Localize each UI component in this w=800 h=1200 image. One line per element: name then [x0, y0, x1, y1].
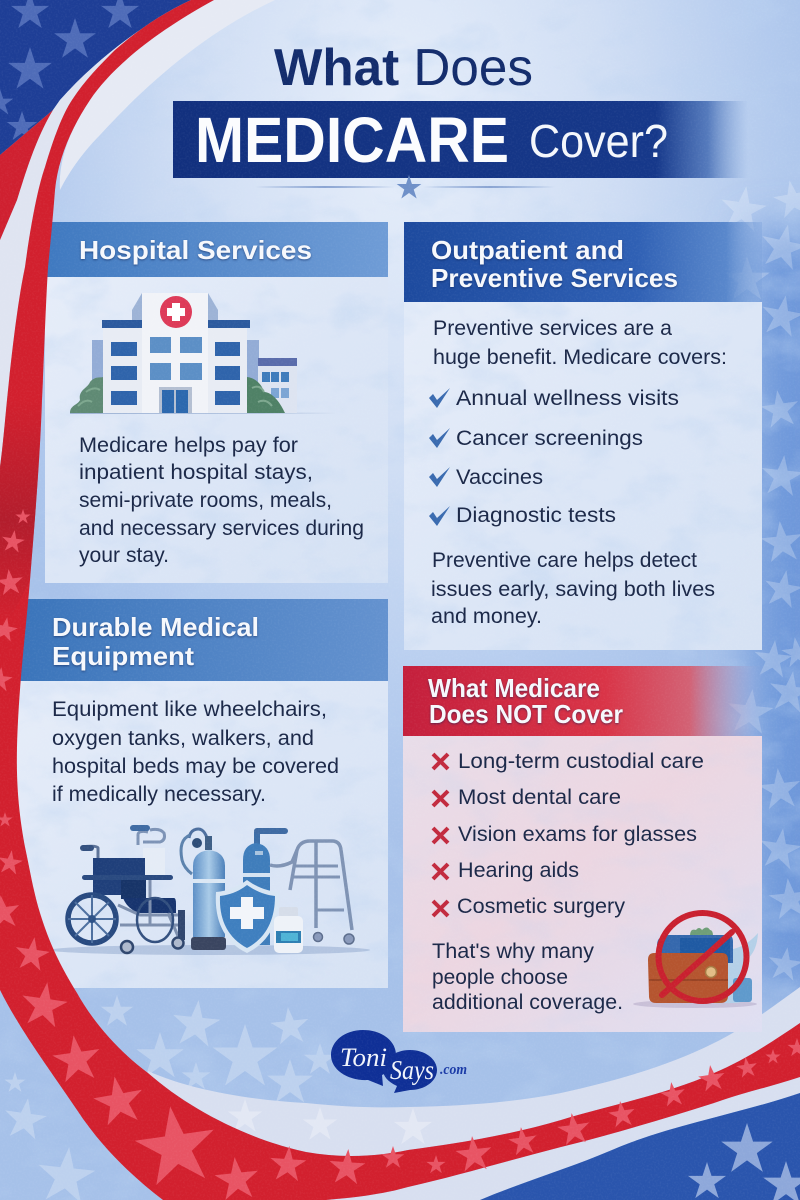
icon: medical equipment group [50, 825, 370, 955]
outpatient intro text: huge benefit. Medicare covers: [433, 346, 727, 369]
icon: hospital building [70, 293, 335, 414]
icon: wheelchair [68, 825, 185, 953]
durable medical equipment text: hospital beds may be covered [52, 755, 339, 778]
logo wordmark: .com [440, 1062, 467, 1078]
hospital services header [45, 222, 388, 277]
red ribbon stars [0, 509, 800, 1200]
title divider with star [255, 175, 555, 199]
logo speech bubble left [331, 1030, 396, 1086]
icon: shield with cross [216, 880, 279, 953]
durable medical equipment text [52, 698, 339, 806]
ribbon: bottom white stripes [148, 987, 800, 1200]
hospital services text: Medicare helps pay for [79, 434, 298, 457]
panel: what medicare does not cover [403, 666, 770, 1032]
not covered list [433, 750, 704, 918]
hospital services text [79, 434, 364, 567]
logo wordmark: Toni [340, 1043, 387, 1072]
logo speech bubble right [383, 1050, 437, 1093]
check item: diagnostic tests: Diagnostic tests [456, 504, 616, 527]
flag corner stars [0, 0, 139, 140]
icon: oxygen tanks [181, 828, 288, 950]
icon: walker [270, 841, 354, 944]
durable medical equipment header: Durable Medical [52, 612, 259, 642]
stars on white bottom ribbon [228, 1099, 432, 1144]
title [173, 39, 748, 199]
durable medical equipment header [15, 599, 388, 681]
check item: vaccines: Vaccines [456, 466, 543, 489]
outpatient intro text: Preventive services are a [433, 317, 672, 340]
top-left flag corner [0, 0, 191, 155]
x item: most dental care: Most dental care [458, 786, 621, 809]
durable medical equipment header: Equipment [52, 641, 194, 671]
outpatient closing text: and money. [431, 605, 542, 628]
icon: crossed-out wallet [633, 913, 758, 1008]
x item: cosmetic surgery: Cosmetic surgery [457, 895, 625, 918]
durable medical equipment text: oxygen tanks, walkers, and [52, 727, 314, 750]
panel: durable medical equipment [15, 599, 388, 988]
logo wordmark [340, 1043, 467, 1085]
outpatient header [404, 222, 762, 302]
covered services checklist [429, 387, 679, 527]
hospital services header: Hospital Services [79, 235, 312, 265]
check item: annual wellness visits: Annual wellness visits [456, 387, 679, 410]
not covered closing text: people choose [432, 966, 568, 989]
durable medical equipment text: Equipment like wheelchairs, [52, 698, 327, 721]
hospital services text: semi-private rooms, meals, [79, 489, 332, 512]
x item: long-term custodial care: Long-term custodial care [458, 750, 704, 773]
hospital services text: inpatient hospital stays, [79, 461, 313, 484]
title line: What Does: What Does [274, 39, 533, 97]
logo wordmark: Says [390, 1055, 434, 1085]
panel: outpatient and preventive services [404, 222, 762, 650]
x item: hearing aids: Hearing aids [458, 859, 579, 882]
outpatient header: Preventive Services [431, 263, 678, 293]
hospital services text: your stay. [79, 544, 169, 567]
bottom-right flag corner [480, 1093, 800, 1200]
right side background stars [718, 177, 800, 982]
check item: cancer screenings: Cancer screenings [456, 427, 643, 450]
durable medical equipment text: if medically necessary. [52, 783, 266, 806]
title line: Cover: Cover? [529, 115, 668, 167]
bottom background stars [2, 995, 336, 1200]
panel: hospital services [45, 222, 388, 583]
not covered header: Does NOT Cover [429, 699, 623, 729]
ribbon: top and left flag stripes [0, 0, 275, 467]
not covered header: What Medicare [428, 673, 600, 703]
not covered header [403, 666, 770, 736]
not covered closing text [432, 940, 623, 1014]
outpatient closing text: issues early, saving both lives [431, 578, 715, 601]
x item: vision exams for glasses: Vision exams for glasses [458, 823, 697, 846]
title banner [173, 101, 748, 178]
title line: Medicare: MEDICARE [195, 104, 509, 176]
outpatient intro text [433, 317, 727, 369]
not covered closing text: additional coverage. [432, 991, 623, 1014]
not covered closing text: That's why many [432, 940, 595, 963]
hospital services text: and necessary services during [79, 517, 364, 540]
icon: pill bottle [274, 907, 303, 953]
outpatient closing text [431, 549, 715, 628]
outpatient closing text: Preventive care helps detect [432, 549, 697, 572]
outpatient header: Outpatient and [431, 235, 624, 265]
logo: ToniSays.com [331, 1030, 467, 1093]
